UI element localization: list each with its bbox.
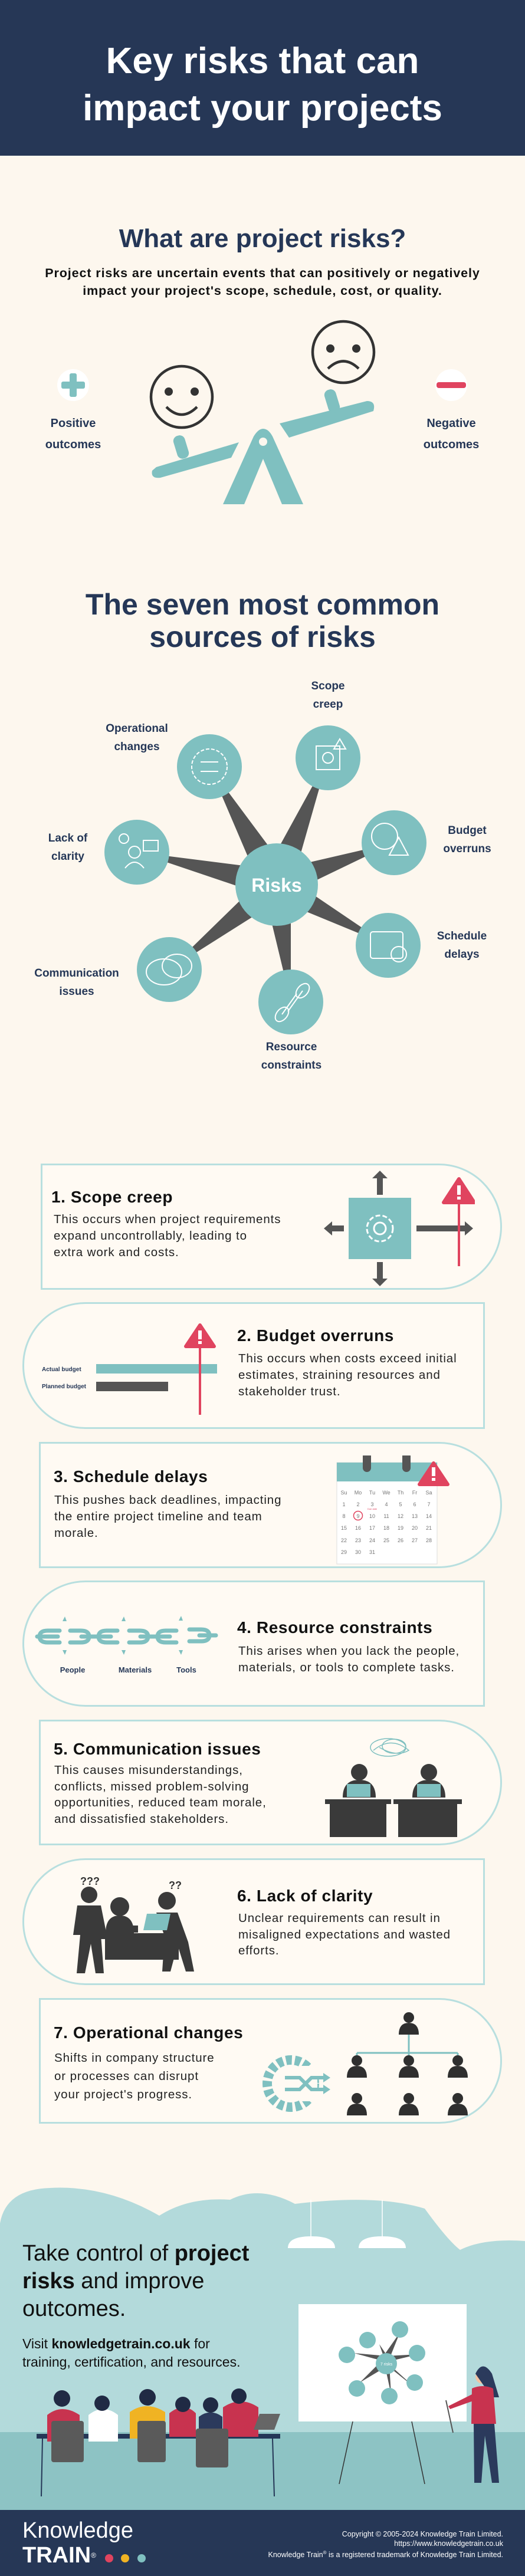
icon: confused team: ?? xyxy=(169,1880,182,1891)
icon: calendar: 19 xyxy=(398,1525,403,1531)
text: morale. xyxy=(54,1526,99,1540)
text: or processes can disrupt xyxy=(54,2069,199,2083)
cta heading: Take control of project xyxy=(22,2241,249,2266)
label: resource constraints: constraints xyxy=(261,1059,321,1072)
icon: scope expansion xyxy=(324,1171,475,1286)
label: negative outcomes: Negative xyxy=(426,417,476,430)
seesaw plank xyxy=(152,388,374,504)
whiteboard xyxy=(298,2304,467,2484)
label: schedule delays xyxy=(437,930,487,961)
title: 6. Lack of clarity xyxy=(237,1887,373,1905)
card 4: resource constraints xyxy=(22,1581,485,1707)
icon: calendar: 17 xyxy=(369,1525,375,1531)
card 5: communication issues xyxy=(39,1720,502,1845)
text xyxy=(54,2051,215,2101)
icon: plus xyxy=(57,369,89,401)
title: impact your projects xyxy=(83,88,442,129)
footer xyxy=(0,2510,525,2576)
label: budget overruns xyxy=(443,824,491,855)
text xyxy=(238,1644,460,1674)
text: This occurs when project requirements xyxy=(54,1213,281,1226)
icon: broken chains: Materials xyxy=(119,1665,152,1674)
text: This arises when you lack the people, xyxy=(238,1644,460,1658)
label: communication issues: Communication xyxy=(34,967,119,980)
title: 2. Budget overruns xyxy=(237,1326,394,1345)
icon: calendar: 31 xyxy=(369,1549,375,1555)
icon: calendar: 15 xyxy=(341,1525,347,1531)
heading: seven sources: sources of risks xyxy=(149,620,376,653)
copyright text xyxy=(268,2530,503,2559)
icon: calendar: 21 xyxy=(426,1525,432,1531)
icon: calendar: 23 xyxy=(355,1537,361,1543)
icon: minus xyxy=(435,369,467,401)
text: materials, or tools to complete tasks. xyxy=(238,1661,455,1674)
icon: calendar: 20 xyxy=(412,1525,418,1531)
icon: calendar: 28 xyxy=(426,1537,432,1543)
icon: calendar: 18 xyxy=(383,1525,389,1531)
heading: seven sources: The seven most common xyxy=(86,588,439,621)
intro text: Project risks are uncertain events that can positively or negatively xyxy=(45,266,480,280)
icon: confused team: ??? xyxy=(80,1875,100,1887)
text xyxy=(238,1352,457,1398)
text: the entire project timeline and team xyxy=(54,1510,262,1523)
label: resource constraints: Resource xyxy=(266,1041,317,1053)
text xyxy=(238,1911,451,1957)
intro text xyxy=(45,266,480,298)
label: lack of clarity: Lack of xyxy=(48,832,87,845)
bar chart: Planned budget xyxy=(42,1384,87,1390)
label: operational changes xyxy=(106,722,168,753)
star diagram xyxy=(104,725,426,1034)
text: expand uncontrollably, leading to xyxy=(54,1229,247,1243)
title: Key risks that can xyxy=(106,41,419,81)
icon: calendar: 30 xyxy=(355,1549,361,1555)
text: This causes misunderstandings, xyxy=(54,1763,243,1777)
icon: two people at desks xyxy=(325,1738,462,1837)
label: positive outcomes: outcomes xyxy=(45,438,101,451)
icon: calendar: 8 xyxy=(342,1513,346,1519)
icon: calendar: 11 xyxy=(383,1513,389,1519)
icon: calendar: 10 xyxy=(369,1513,375,1519)
icon: calendar: 27 xyxy=(412,1537,418,1543)
title: 7. Operational changes xyxy=(54,2023,243,2042)
cta text: Visit knowledgetrain.co.uk for xyxy=(22,2336,210,2351)
cta heading xyxy=(22,2241,249,2321)
icon: gear and org chart xyxy=(262,2012,468,2115)
text: misaligned expectations and wasted xyxy=(238,1927,451,1941)
icon: calendar: 22 xyxy=(341,1537,347,1543)
logo xyxy=(22,2518,146,2568)
icon: calendar: Tu xyxy=(369,1490,375,1496)
icon: calendar: 3 xyxy=(370,1501,374,1507)
icon: calendar: Sa xyxy=(425,1490,432,1496)
bottom scene background xyxy=(0,2188,525,2510)
copyright text: https://www.knowledgetrain.co.uk xyxy=(394,2539,503,2548)
heading: what are project risks: What are project risks? xyxy=(119,224,406,253)
icon: calendar: 14 xyxy=(426,1513,432,1519)
icon: calendar: 25 xyxy=(383,1537,389,1543)
icon: calendar: 12 xyxy=(398,1513,403,1519)
card 2: budget overruns xyxy=(22,1302,485,1429)
text: opportunities, reduced team morale, xyxy=(54,1796,267,1809)
label: positive outcomes xyxy=(45,417,101,451)
card 7: operational changes xyxy=(39,1998,502,2124)
icon: broken chains: Tools xyxy=(176,1665,196,1674)
label: operational changes: Operational xyxy=(106,722,168,735)
text: extra work and costs. xyxy=(54,1246,179,1259)
label: resource constraints xyxy=(261,1041,321,1072)
seesaw illustration xyxy=(57,320,467,504)
icon: happy face xyxy=(151,366,212,428)
title: 4. Resource constraints xyxy=(237,1618,432,1637)
presenter xyxy=(446,2366,499,2483)
cta heading: outcomes. xyxy=(22,2296,126,2321)
label: scope creep: creep xyxy=(313,698,343,711)
label: communication issues: issues xyxy=(59,985,94,998)
text: This occurs when costs exceed initial xyxy=(238,1352,457,1365)
copyright text: Knowledge Train® is a registered trademark of Knowledge Train Limited. xyxy=(268,2550,503,2559)
icon: calendar: Due date xyxy=(368,1507,378,1510)
text: your project's progress. xyxy=(54,2088,192,2101)
text: estimates, straining resources and xyxy=(238,1368,441,1382)
label: budget overruns: Budget xyxy=(448,824,487,837)
label: positive outcomes: Positive xyxy=(51,417,96,430)
label: negative outcomes xyxy=(424,417,479,451)
icon: broken chains xyxy=(35,1616,218,1674)
text: Unclear requirements can result in xyxy=(238,1911,441,1925)
logo: TRAIN® xyxy=(22,2543,96,2568)
label: communication issues xyxy=(34,967,119,998)
label: budget overruns: overruns xyxy=(443,843,491,855)
icon: calendar: 16 xyxy=(355,1525,361,1531)
icon: calendar: Su xyxy=(340,1490,347,1496)
bar chart: Actual budget xyxy=(42,1366,81,1373)
card 6: lack of clarity xyxy=(22,1858,485,1985)
label: scope creep: Scope xyxy=(311,680,345,692)
title: 3. Schedule delays xyxy=(54,1467,208,1486)
cta heading: risks and improve xyxy=(22,2269,204,2294)
text: stakeholder trust. xyxy=(238,1385,340,1398)
text xyxy=(54,1763,267,1826)
text xyxy=(54,1213,281,1259)
icon: calendar: 29 xyxy=(341,1549,347,1555)
icon: calendar: 24 xyxy=(369,1537,375,1543)
label: negative outcomes: outcomes xyxy=(424,438,479,451)
logo: Knowledge xyxy=(22,2518,133,2543)
team at table xyxy=(37,2388,280,2496)
title xyxy=(83,41,442,129)
icon: sad face xyxy=(313,321,374,383)
icon: calendar: 9 xyxy=(356,1513,360,1519)
icon: calendar: 7 xyxy=(427,1501,431,1507)
bar chart xyxy=(42,1323,217,1415)
icon: calendar: 5 xyxy=(399,1501,402,1507)
label: schedule delays: Schedule xyxy=(437,930,487,942)
icon: broken chains: People xyxy=(60,1665,85,1674)
label: lack of clarity: clarity xyxy=(51,850,84,863)
icon: calendar: 2 xyxy=(356,1501,360,1507)
text xyxy=(54,1493,281,1540)
card 3: schedule delays xyxy=(39,1442,502,1568)
icon: calendar: Mo xyxy=(355,1490,362,1496)
icon: calendar: Fr xyxy=(412,1490,417,1496)
header banner xyxy=(0,0,525,156)
text: This pushes back deadlines, impacting xyxy=(54,1493,281,1507)
icon: calendar: 1 xyxy=(342,1501,346,1507)
icon: calendar: 6 xyxy=(413,1501,416,1507)
card 1: scope creep xyxy=(41,1164,502,1290)
icon: calendar: 26 xyxy=(398,1537,403,1543)
title: 5. Communication issues xyxy=(54,1740,261,1758)
copyright text: Copyright © 2005-2024 Knowledge Train Limited. xyxy=(342,2530,503,2538)
title: 1. Scope creep xyxy=(51,1188,173,1206)
text: Shifts in company structure xyxy=(54,2051,215,2065)
text: efforts. xyxy=(238,1944,280,1957)
cta text xyxy=(22,2336,240,2370)
label: scope creep xyxy=(311,680,345,711)
text: conflicts, missed problem-solving xyxy=(54,1780,249,1793)
hub label: Risks xyxy=(251,875,302,896)
icon: calendar xyxy=(336,1455,449,1564)
icon: calendar: Th xyxy=(398,1490,403,1496)
heading: seven sources xyxy=(86,588,439,653)
whiteboard: 7 risks xyxy=(380,2363,393,2367)
cta text: training, certification, and resources. xyxy=(22,2354,240,2370)
label: lack of clarity xyxy=(48,832,87,863)
icon: calendar: 13 xyxy=(412,1513,418,1519)
label: operational changes: changes xyxy=(114,741,160,753)
icon: calendar: We xyxy=(382,1490,391,1496)
icon: calendar: 4 xyxy=(385,1501,388,1507)
intro text: impact your project's scope, schedule, cost, or quality. xyxy=(83,284,442,298)
label: schedule delays: delays xyxy=(444,948,480,961)
icon: confused team xyxy=(73,1875,194,1973)
text: and dissatisfied stakeholders. xyxy=(54,1812,229,1826)
